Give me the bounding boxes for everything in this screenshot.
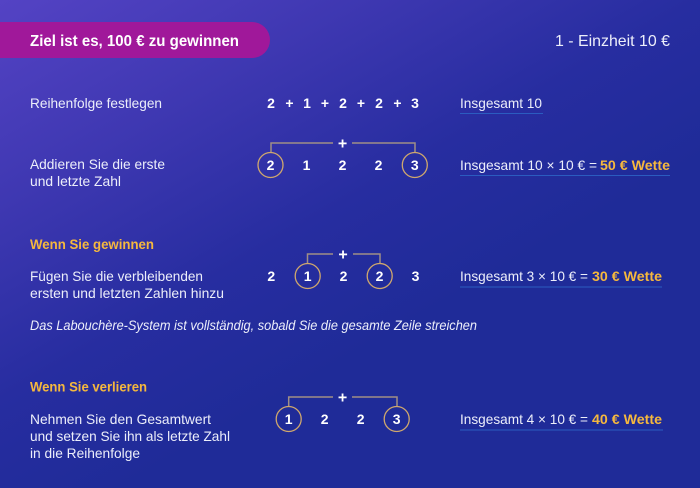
- bet total: 50 € Wette: [600, 157, 670, 173]
- step: set sequence: [30, 95, 543, 114]
- bracket with plus: [271, 136, 415, 153]
- title banner: Ziel ist es, 100 € zu gewinnen: [30, 33, 239, 50]
- numbers with circled ends: [276, 406, 409, 432]
- bet total: Insgesamt 10 × 10 € =: [460, 157, 597, 173]
- sequence numbers: +: [321, 95, 329, 111]
- step: add first and last: [30, 136, 670, 189]
- sequence numbers: 3: [411, 95, 419, 111]
- numbers with circled values: 2: [376, 268, 384, 284]
- sequence numbers: 2: [375, 95, 383, 111]
- bracket with plus: +: [338, 246, 348, 264]
- sequence total: Insgesamt 10: [460, 95, 542, 111]
- instruction text: [30, 411, 230, 461]
- numbers with circled ends: 2: [321, 411, 329, 427]
- bracket with plus: [308, 246, 380, 264]
- numbers with circled ends: 2: [267, 157, 275, 173]
- sequence numbers: [267, 95, 419, 111]
- instruction text: ersten und letzten Zahlen hinzu: [30, 285, 224, 301]
- bet total: 30 € Wette: [592, 268, 662, 284]
- heading: Wenn Sie verlieren: [30, 378, 147, 394]
- instruction text: Nehmen Sie den Gesamtwert: [30, 411, 211, 427]
- numbers with circled values: 3: [412, 268, 420, 284]
- italic note: Das Labouchère-System ist vollständig, sobald Sie die gesamte Zeile streichen: [30, 317, 477, 333]
- sequence numbers: +: [357, 95, 365, 111]
- instruction text: Fügen Sie die verbleibenden: [30, 268, 203, 284]
- numbers with circled ends: 1: [303, 157, 311, 173]
- bet total: [460, 411, 663, 430]
- numbers with circled values: 1: [304, 268, 312, 284]
- bracket with plus: [289, 390, 397, 406]
- bet total: [460, 157, 670, 176]
- bet total: 40 € Wette: [592, 411, 662, 427]
- numbers with circled ends: [258, 152, 427, 178]
- instruction text: Addieren Sie die erste: [30, 156, 165, 172]
- sequence label: Reihenfolge festlegen: [30, 95, 162, 111]
- sequence numbers: 2: [339, 95, 347, 111]
- bracket with plus: +: [338, 390, 347, 406]
- heading: Wenn Sie gewinnen: [30, 236, 154, 252]
- instruction text: und letzte Zahl: [30, 173, 121, 189]
- bet total: Insgesamt 4 × 10 € =: [460, 411, 588, 427]
- bet total: [460, 268, 662, 287]
- sequence numbers: +: [285, 95, 294, 111]
- numbers with circled ends: 2: [357, 411, 365, 427]
- sequence numbers: 2: [267, 95, 275, 111]
- step: if you win: [30, 236, 662, 333]
- sequence numbers: +: [393, 95, 402, 111]
- sequence numbers: 1: [303, 95, 311, 111]
- bracket with plus: +: [338, 136, 347, 152]
- numbers with circled ends: 3: [393, 411, 401, 427]
- numbers with circled values: [267, 264, 420, 288]
- instruction text: und setzen Sie ihn als letzte Zahl: [30, 428, 230, 444]
- instruction text: in die Reihenfolge: [30, 445, 140, 461]
- bet total: Insgesamt 3 × 10 € =: [460, 268, 588, 284]
- step: if you lose: [30, 378, 663, 461]
- numbers with circled ends: 3: [411, 157, 419, 173]
- numbers with circled values: 2: [340, 268, 348, 284]
- title banner: [0, 22, 270, 58]
- instruction text: [30, 268, 224, 301]
- numbers with circled ends: 2: [375, 157, 383, 173]
- numbers with circled ends: 2: [339, 157, 347, 173]
- unit value label: 1 - Einzheit 10 €: [555, 33, 670, 50]
- numbers with circled ends: 1: [285, 411, 293, 427]
- instruction text: [30, 156, 165, 189]
- numbers with circled values: 2: [267, 268, 275, 284]
